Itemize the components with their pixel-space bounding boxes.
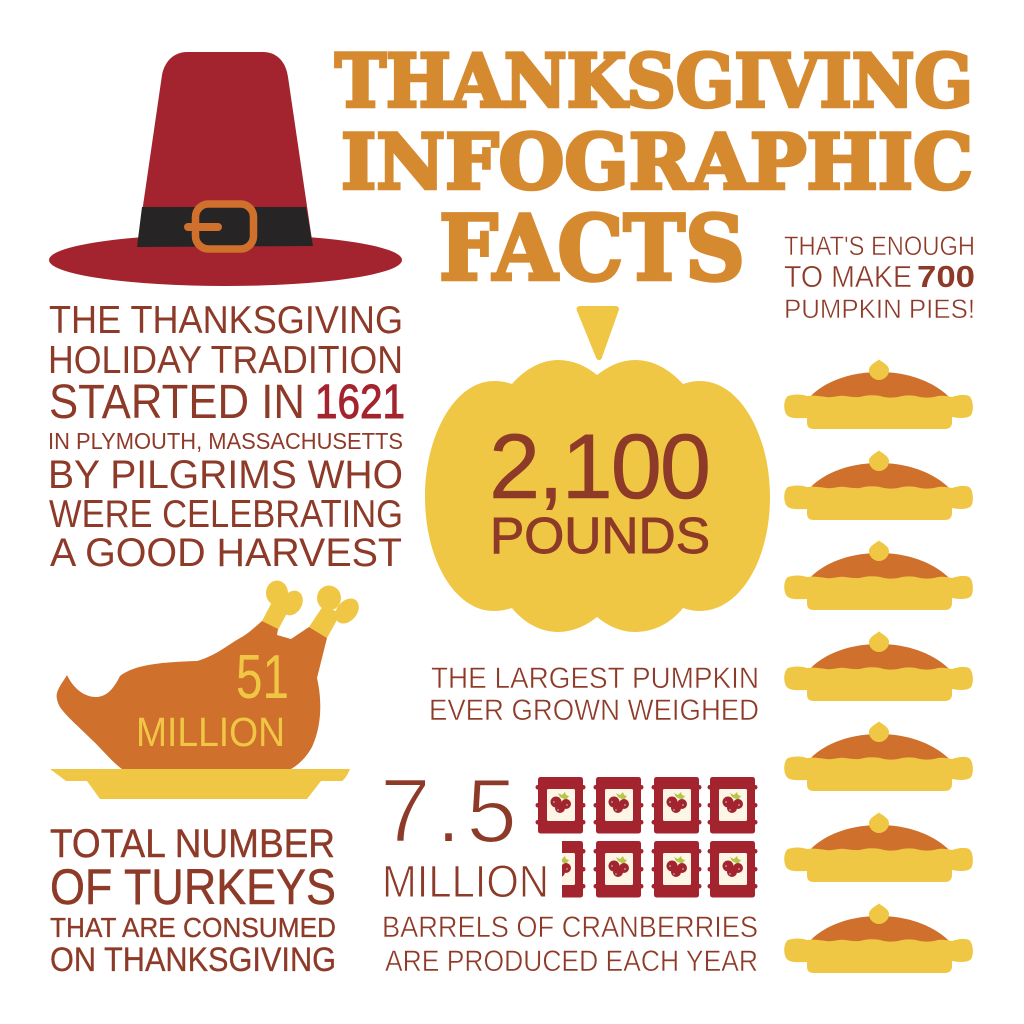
cranberry statistic: MILLION [382,856,549,907]
text block: total turkeys: THAT ARE CONSUMED [50,912,336,943]
text block: barrels of cranberries [382,911,758,978]
cranberry barrels pictogram [536,777,758,898]
text block: pumpkin pies: PUMPKIN PIES! [784,294,975,324]
text block: largest pumpkin [429,662,759,727]
text block: largest pumpkin: EVER GROWN WEIGHED [429,694,759,727]
text block: barrels of cranberries: BARRELS OF CRANBERRIES [382,911,758,944]
cranberry statistic [380,761,549,907]
text block: history of the holiday: WERE CELEBRATING [49,493,403,536]
title [335,38,973,302]
text block: pumpkin pies: 700 [917,259,975,294]
text block: history of the holiday: IN PLYMOUTH, MASSACHUSETTS [48,428,403,454]
title: INFOGRAPHIC [341,118,973,206]
text block: history of the holiday: STARTED IN [49,376,305,429]
pumpkin with weight [425,309,770,632]
text block: total turkeys: OF TURKEYS [50,859,336,915]
title: THANKSGIVING [335,38,973,124]
text block: history of the holiday: 1621 [315,376,405,429]
cranberry statistic: 7.5 [380,761,517,862]
text block: history of the holiday: A GOOD HARVEST [50,531,402,575]
text block: largest pumpkin: THE LARGEST PUMPKIN [431,662,759,695]
turkey on a platter: 51 [236,643,289,712]
turkey on a platter [50,580,364,799]
pumpkin with weight: POUNDS [490,507,710,564]
text block: pumpkin pies: TO MAKE [784,259,912,294]
text block: total turkeys: ON THANKSGIVING [50,941,336,979]
text block: history of the holiday: HOLIDAY TRADITION [48,339,403,382]
turkey on a platter: MILLION [136,709,285,755]
text block: history of the holiday: THE THANKSGIVING [49,299,403,342]
text block: barrels of cranberries: ARE PRODUCED EACH YEAR [385,945,758,978]
text block: pumpkin pies [784,231,975,324]
text block: total turkeys [50,822,336,979]
text block: history of the holiday [48,299,405,575]
text block: history of the holiday: BY PILGRIMS WHO [48,453,403,497]
text block: pumpkin pies: THAT'S ENOUGH [784,231,975,261]
seven pumpkin pies [784,360,973,973]
pumpkin with weight: 2,100 [489,416,711,518]
pilgrim hat icon [49,52,402,286]
text block: total turkeys: TOTAL NUMBER [50,822,335,866]
title: FACTS [439,196,745,302]
